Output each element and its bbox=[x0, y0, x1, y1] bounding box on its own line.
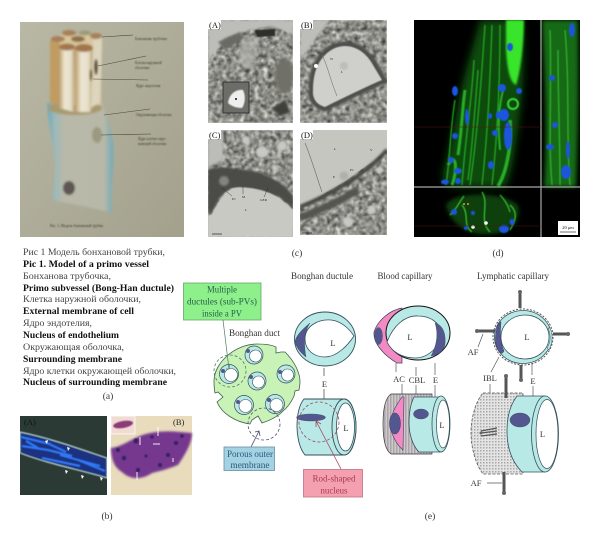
label (c): (c) bbox=[292, 248, 302, 259]
Blood capillary cylinder bbox=[383, 394, 450, 454]
Bonghan duct cross-section bbox=[214, 344, 300, 424]
callout: rod-shaped nucleus: nucleus bbox=[320, 486, 348, 496]
Lymphatic capillary cylinder: L bbox=[540, 429, 545, 439]
label (d): (d) bbox=[492, 248, 504, 259]
panel c D: electron micrograph: Pv bbox=[350, 168, 354, 172]
Blood capillary labels: E bbox=[433, 375, 438, 385]
Lymphatic capillary labels: AF bbox=[471, 478, 482, 488]
tag D: (D) bbox=[301, 130, 313, 140]
callout: porous outer membrane: membrane bbox=[230, 461, 270, 471]
panel c C: electron micrograph: GER bbox=[260, 198, 268, 202]
main view green tissue bbox=[441, 20, 524, 187]
panel a: bilingual caption text: Ядро эндотелия, bbox=[23, 318, 92, 328]
panel c B: electron micrograph: L bbox=[341, 70, 343, 74]
panel a: bilingual caption text: Ядро клетки окружающей оболочки, bbox=[23, 366, 176, 376]
panel b A: fluorescent vessel bbox=[20, 416, 107, 495]
panel c C: electron micrograph: L bbox=[245, 208, 247, 212]
panel c D: electron micrograph: L bbox=[334, 147, 336, 151]
tag A: (A) bbox=[24, 417, 36, 427]
scale bar: 20 μm bbox=[562, 225, 574, 230]
photo captions: Клетка наружной bbox=[135, 61, 162, 65]
photo captions bbox=[50, 37, 172, 228]
panel a: bilingual caption text: Nucleus of surrounding membrane bbox=[23, 377, 167, 387]
callout: porous outer membrane bbox=[224, 447, 274, 471]
Lymphatic capillary cross-section: L bbox=[524, 332, 530, 342]
label (b): (b) bbox=[101, 511, 113, 522]
panel c B: electron micrograph: W bbox=[330, 57, 334, 61]
panel a: bilingual caption text: Клетка наружной оболочки, bbox=[23, 294, 141, 304]
label (a): (a) bbox=[103, 391, 113, 402]
panel a: bilingual caption text: Рис 1 Модель бонхановой трубки, bbox=[23, 247, 165, 257]
photo captions: жающей оболочки bbox=[137, 142, 166, 146]
panel c D: electron micrograph: P bbox=[333, 175, 335, 179]
Lymphatic capillary labels bbox=[468, 334, 536, 488]
callout: multiple ductules: inside a PV bbox=[202, 310, 242, 320]
Lymphatic capillary labels: AF bbox=[468, 347, 479, 357]
Blood capillary cross-section bbox=[374, 306, 450, 363]
panel c D: electron micrograph: V bbox=[370, 148, 373, 152]
callout: rod-shaped nucleus bbox=[304, 470, 362, 497]
sheath of the vessel bbox=[47, 30, 113, 213]
tag B: (B) bbox=[301, 20, 312, 30]
Blood capillary cylinder: L bbox=[439, 420, 445, 430]
photo captions: Окружающая оболочка bbox=[136, 113, 172, 117]
photo captions: Бонхановы трубочки bbox=[135, 37, 167, 41]
panel e heading: Bonghan ductule: Bonghan ductule bbox=[291, 272, 353, 282]
photo captions: Ядро клетки окру- bbox=[138, 137, 167, 141]
Bonghan ductule cross-section bbox=[294, 312, 356, 366]
panel a: bilingual caption text: Nucleus of endothelium bbox=[23, 330, 120, 340]
cross-hair lines bbox=[414, 20, 580, 237]
Lymphatic capillary cylinder bbox=[471, 374, 558, 495]
dashed highlight circles and leader arrows bbox=[214, 320, 280, 447]
tag C: (C) bbox=[209, 130, 220, 140]
panel a: bilingual caption text: Окружающая оболочка, bbox=[23, 342, 124, 352]
Bonghan ductule cross-section: L bbox=[330, 338, 336, 348]
Blood capillary labels: CBL bbox=[409, 375, 425, 385]
Bonghan ductule E label: E bbox=[322, 379, 327, 389]
Blood capillary labels: AC bbox=[393, 374, 405, 384]
panel e heading: Blood capillary: Blood capillary bbox=[378, 272, 433, 282]
callout: rod-shaped nucleus: Rod-shaped bbox=[312, 474, 356, 484]
panel c C: electron micrograph: Pv bbox=[232, 197, 236, 201]
panel c C: electron micrograph bbox=[208, 130, 293, 237]
Lymphatic capillary cross-section bbox=[475, 290, 570, 382]
bottom orthogonal view bbox=[446, 192, 519, 234]
panel a: primo vessel model photo bbox=[20, 22, 184, 237]
callout: multiple ductules: Multiple bbox=[207, 286, 237, 296]
panel a: bilingual caption text: External membrane of cell bbox=[23, 306, 135, 316]
Bonghan ductule E label bbox=[322, 368, 327, 402]
scale bar bbox=[558, 221, 578, 235]
right orthogonal view bbox=[542, 20, 578, 187]
callout lines bbox=[93, 35, 151, 135]
callout: multiple ductules bbox=[184, 283, 261, 320]
Blood capillary labels bbox=[393, 363, 438, 398]
photo captions: Рис. 1. Модель бонхановой трубки bbox=[50, 224, 103, 228]
panel a: bilingual caption text bbox=[23, 247, 176, 387]
Lymphatic capillary labels: IBL bbox=[483, 373, 497, 383]
Bonghan ductule cylinder bbox=[296, 399, 356, 469]
panel d: confocal fluorescence image bbox=[414, 20, 580, 237]
Bonghan ductule cylinder: L bbox=[343, 423, 349, 433]
Blood capillary cross-section: L bbox=[407, 332, 413, 342]
panel c B: electron micrograph bbox=[300, 20, 387, 123]
panel a: bilingual caption text: Бонханова трубочка, bbox=[23, 271, 111, 281]
label (e): (e) bbox=[425, 511, 435, 522]
callout: porous outer membrane: Porous outer bbox=[227, 450, 274, 460]
tag A: (A) bbox=[209, 20, 221, 30]
panel c D: electron micrograph bbox=[300, 130, 387, 235]
panel a: bilingual caption text: Pic 1. Model of a primo vessel bbox=[23, 259, 150, 269]
Bonghan duct label: Bonghan duct bbox=[229, 329, 280, 339]
panel c A: electron micrograph bbox=[208, 20, 294, 123]
callout: multiple ductules: ductules (sub-PVs) bbox=[187, 296, 257, 308]
panel b B: stained section bbox=[111, 416, 192, 495]
photo captions: Ядро эндотелия bbox=[136, 84, 161, 88]
Lymphatic capillary labels: E bbox=[530, 376, 536, 386]
panel e heading: Lymphatic capillary: Lymphatic capillary bbox=[477, 272, 549, 282]
tag B: (B) bbox=[173, 417, 184, 427]
panel c C: electron micrograph: M bbox=[242, 195, 246, 199]
panel a: bilingual caption text: Primo subvessel (Bong-Han ductule) bbox=[23, 283, 174, 293]
panel a: bilingual caption text: Surrounding membrane bbox=[23, 354, 122, 364]
photo captions: оболочки bbox=[135, 66, 149, 70]
